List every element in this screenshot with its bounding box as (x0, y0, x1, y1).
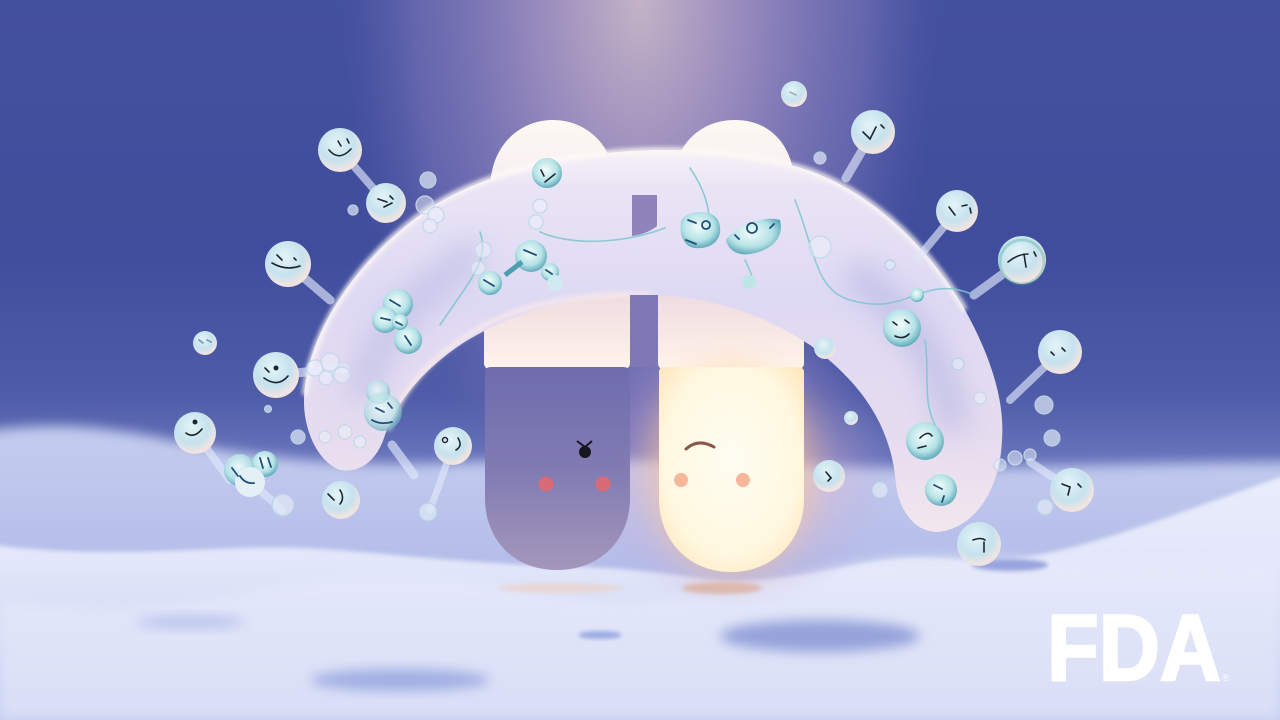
molecules with faces (174, 81, 1094, 566)
snow hills (0, 426, 1280, 720)
molecule (318, 128, 362, 172)
clusters (224, 196, 1036, 506)
molecule (957, 522, 1001, 566)
molecule (844, 411, 858, 425)
molecule (366, 183, 406, 223)
cluster: top left band (478, 240, 563, 295)
small droplets (264, 152, 1060, 521)
registered mark: ® (1222, 673, 1230, 684)
face: left capsule (538, 441, 610, 492)
translucent arch (304, 150, 1002, 532)
cluster: right lower (906, 422, 957, 506)
cluster: lower left (224, 451, 278, 497)
molecule (936, 190, 978, 232)
molecule (253, 352, 299, 398)
FDA logo: FDA (1047, 595, 1221, 700)
warm glow behind the lit capsule (575, 330, 895, 610)
molecule (1050, 468, 1094, 512)
cluster: left arch lower (364, 380, 402, 431)
cluster: right band (883, 288, 924, 347)
translucent bubbles on arch (307, 196, 1036, 471)
connector sticks (195, 132, 1072, 510)
molecule (781, 81, 807, 107)
cluster: left arch upper (372, 289, 422, 354)
molecule (851, 110, 895, 154)
molecule (434, 427, 472, 465)
molecule (813, 460, 845, 492)
molecule (193, 331, 217, 355)
cluster: top center right (726, 219, 781, 289)
molecule (322, 481, 360, 519)
slot between capsules (632, 195, 657, 236)
capsule: right glowing (649, 120, 813, 578)
molecule (174, 412, 216, 454)
molecule (814, 337, 836, 359)
capsule pair (484, 120, 813, 578)
face: right capsule (674, 443, 750, 487)
cluster: top center left (681, 212, 720, 248)
capsule: left dim (484, 120, 630, 570)
molecule (1038, 330, 1082, 374)
molecule (265, 241, 311, 287)
molecule (998, 236, 1046, 284)
molecule (532, 158, 562, 188)
thin linking wires (440, 168, 972, 425)
